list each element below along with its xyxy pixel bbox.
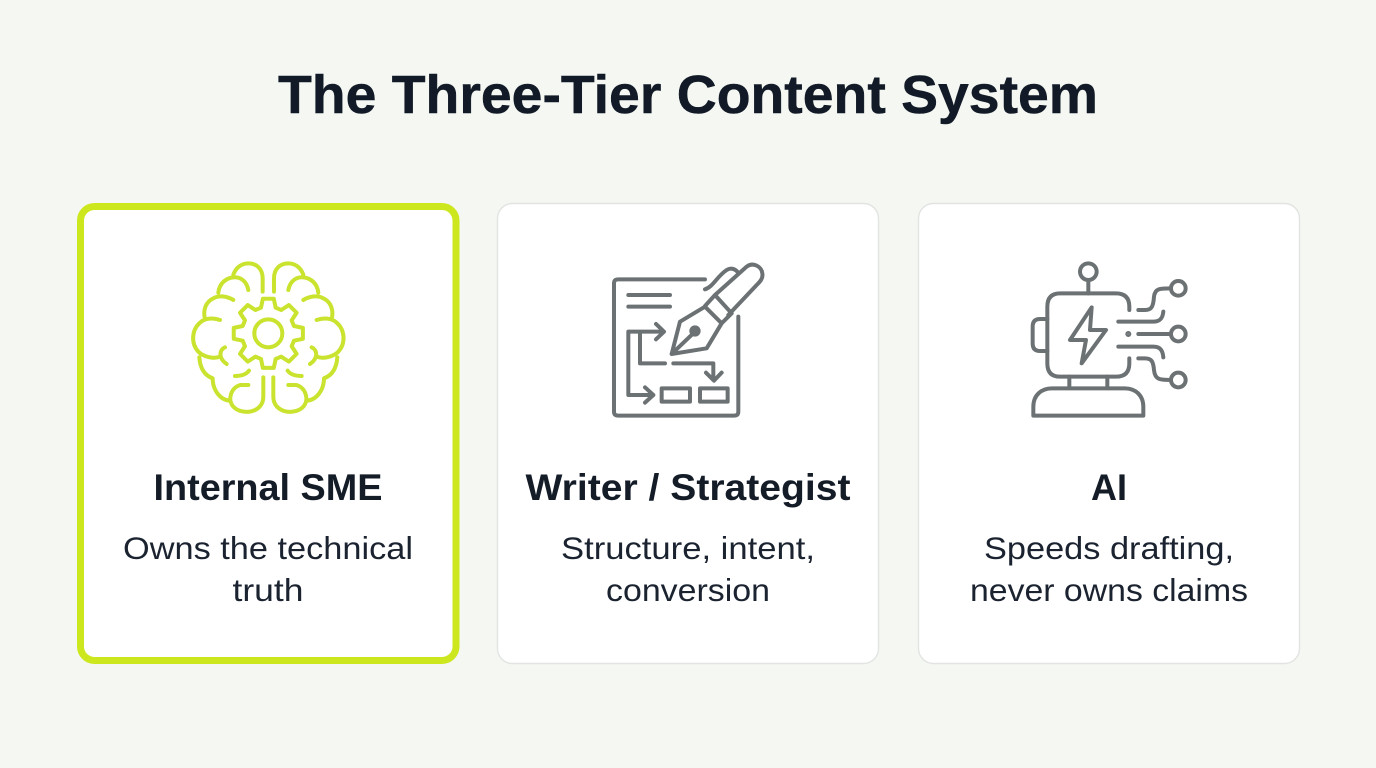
ear — [1033, 319, 1047, 351]
panel: Writer / Strategist — [498, 204, 878, 664]
document lines — [628, 295, 670, 307]
card background: AI — [918, 204, 1300, 664]
heading: Writer / Strategist: Writer / Strategist — [526, 467, 850, 508]
brain left hemisphere — [193, 263, 263, 412]
description: Internal SME — [123, 530, 413, 608]
title: The Three-Tier Content System — [278, 65, 1098, 125]
gear — [234, 299, 303, 368]
document outline — [614, 279, 738, 416]
icon: robot with circuits — [1033, 263, 1186, 416]
description: Writer / Strategist — [561, 530, 815, 608]
description: Internal SME: Owns the technical — [123, 530, 413, 566]
flow boxes — [662, 388, 728, 402]
panel: AI — [918, 204, 1300, 664]
icon: document with fountain pen and flow — [614, 265, 762, 416]
lightning bolt — [1070, 307, 1106, 363]
flow arrows — [628, 324, 722, 403]
card background: Writer / Strategist — [498, 204, 878, 664]
panel: Internal SME — [80, 206, 456, 660]
description: Writer / Strategist: conversion — [606, 572, 770, 608]
brain right hemisphere — [273, 263, 344, 412]
description: Writer / Strategist: Structure, intent, — [561, 530, 815, 566]
description: Internal SME: truth — [232, 572, 304, 608]
heading: AI: AI — [1091, 467, 1127, 508]
card background: Internal SME — [80, 206, 456, 660]
description: AI: never owns claims — [970, 572, 1248, 608]
circuit lines — [1118, 288, 1171, 380]
robot body — [1047, 293, 1129, 377]
antenna — [1082, 281, 1094, 293]
heading: Internal SME: Internal SME — [154, 467, 382, 508]
icon: brain with gear — [193, 263, 344, 412]
base — [1033, 377, 1143, 416]
description: AI: Speeds drafting, — [984, 530, 1234, 566]
description: AI — [970, 530, 1248, 608]
pen — [672, 265, 762, 354]
